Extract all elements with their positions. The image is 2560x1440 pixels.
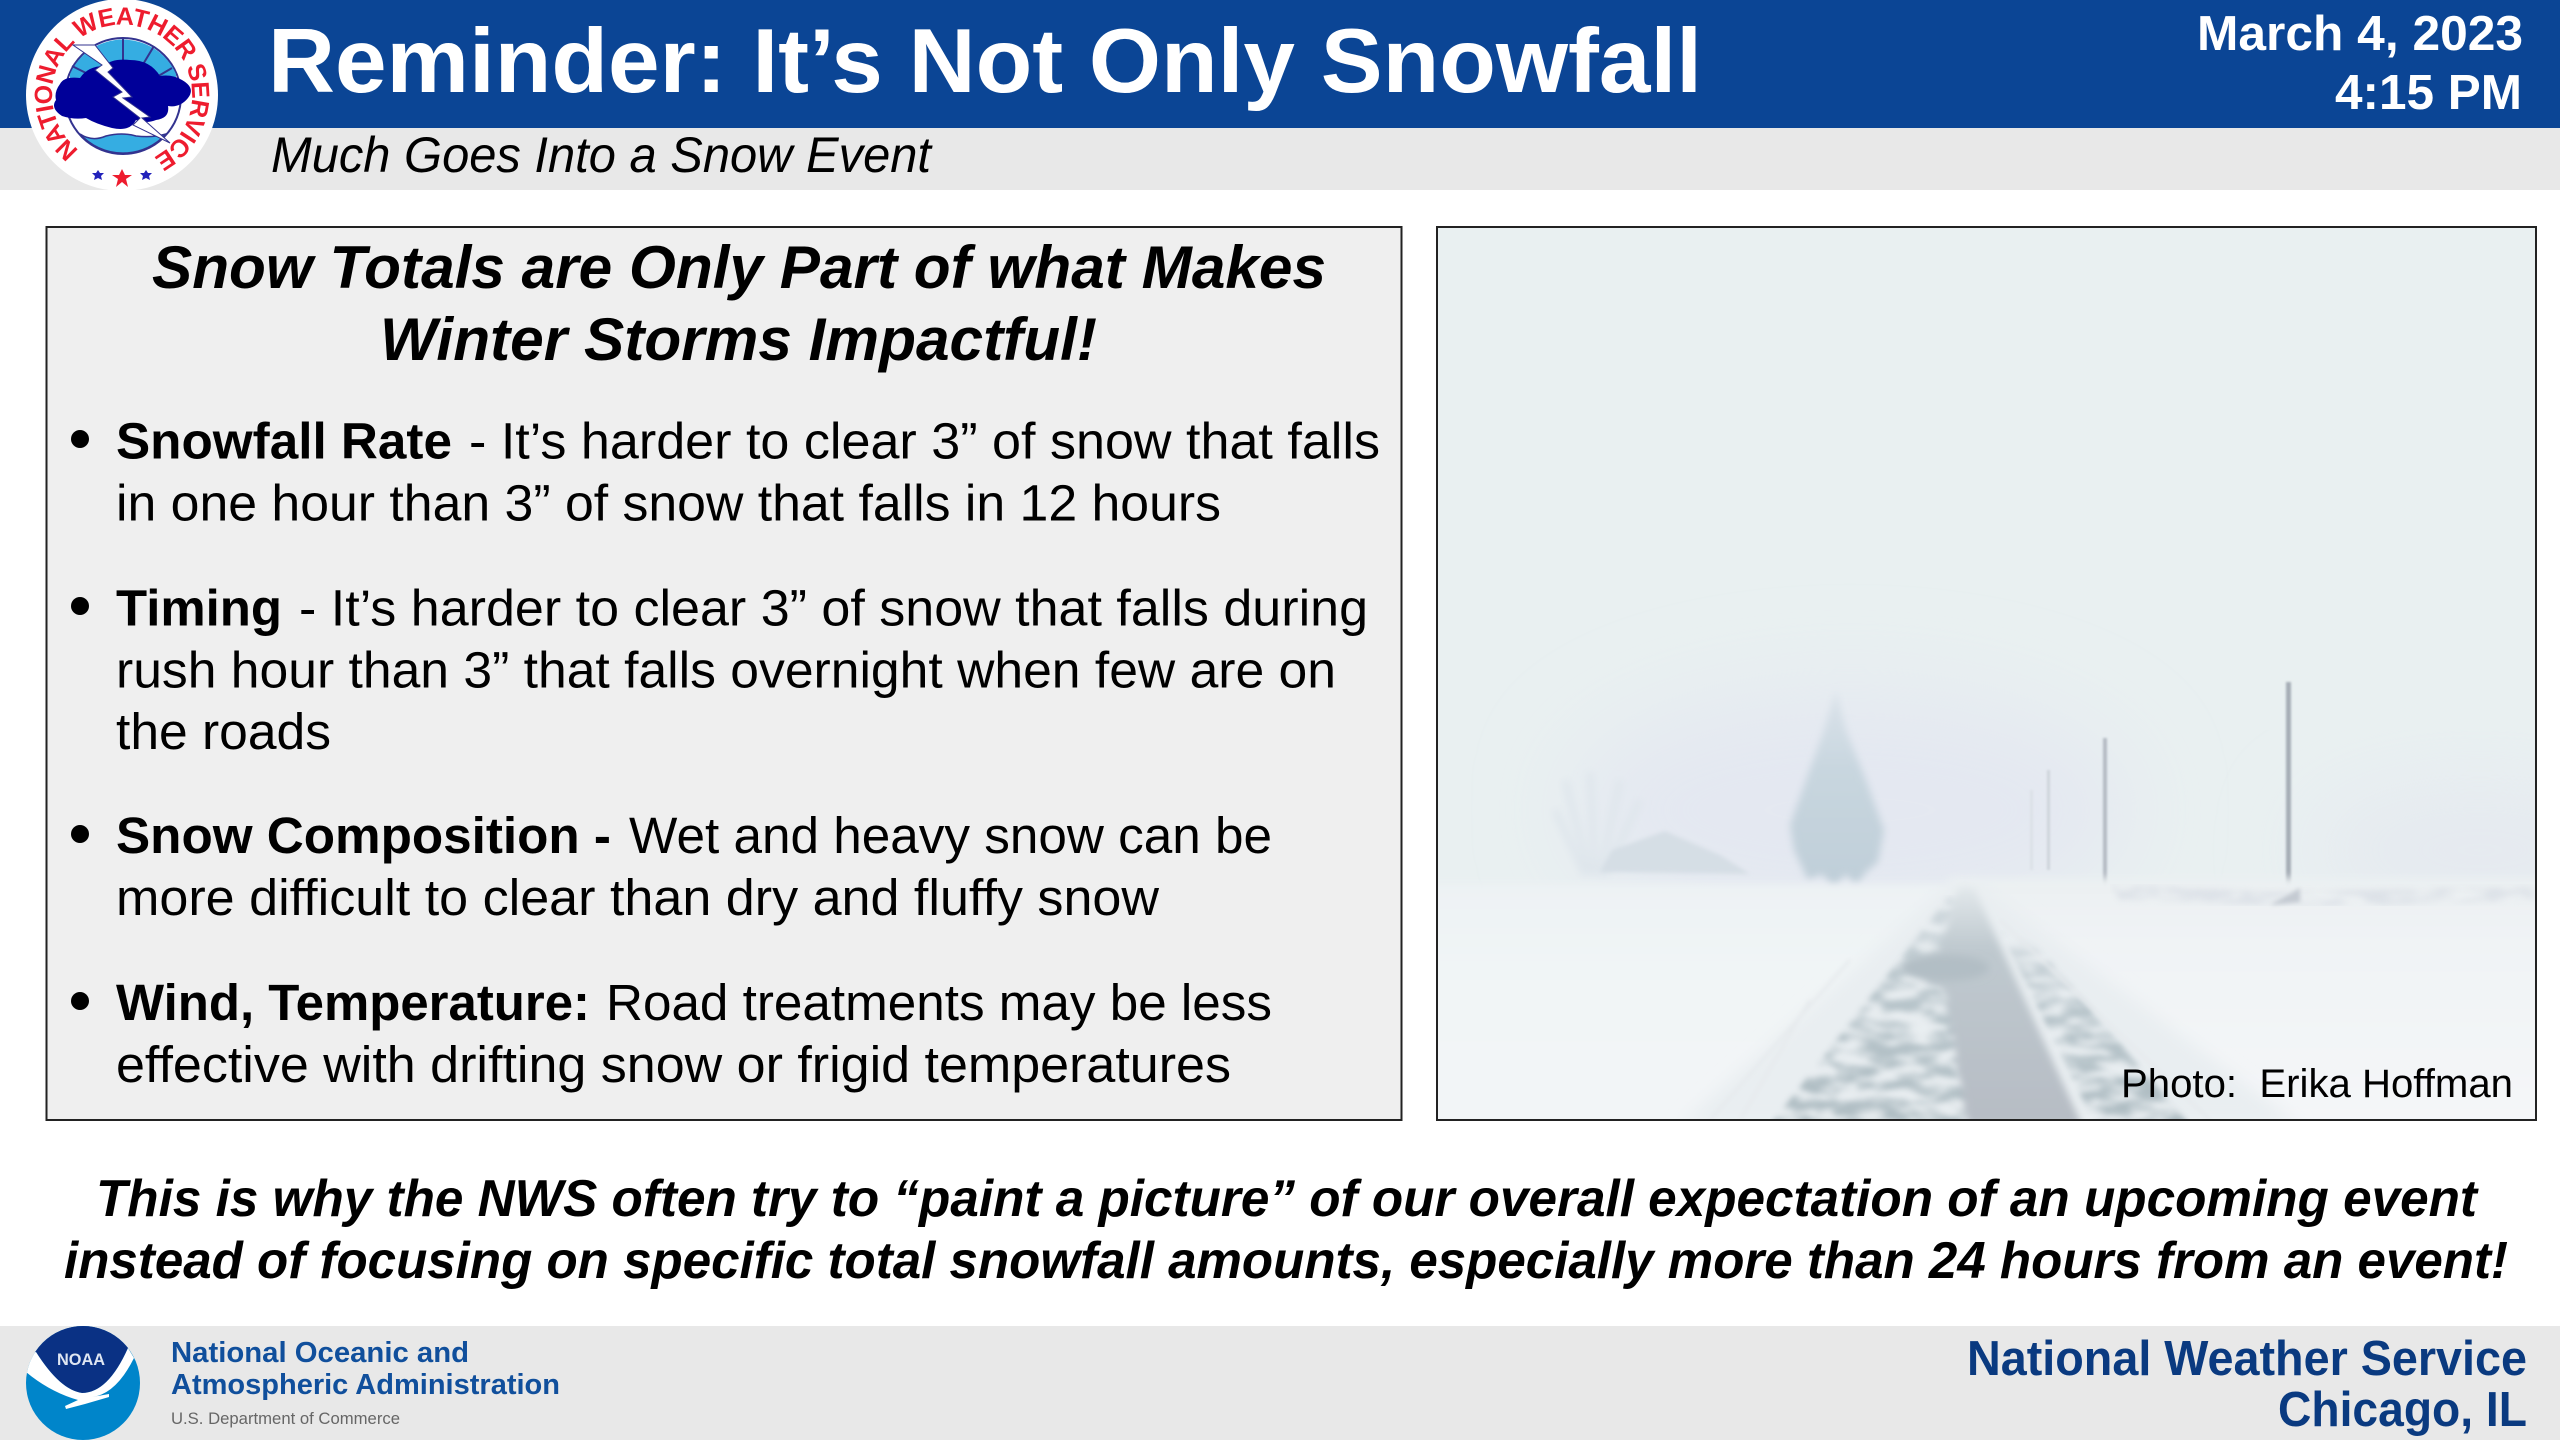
date and time (2197, 7, 2523, 120)
office name (1967, 1332, 2527, 1437)
NOAA agency name: National Oceanic and (171, 1337, 469, 1369)
panel: snow impact factors (46, 227, 1402, 1120)
date and time: 4:15 PM (2335, 66, 2522, 120)
snow field right (2050, 874, 2535, 1119)
footer bar (0, 1326, 2560, 1440)
NOAA agency name: Atmospheric Administration (171, 1369, 560, 1401)
bullet: snow composition: Snow Composition - (116, 807, 611, 864)
evergreen tree (1790, 690, 1884, 888)
closing statement: This is why the NWS often try to “paint a picture” of our overall expectation of an upcoming event (96, 1170, 2480, 1228)
bullet: snowfall rate: - It’s harder to clear 3” of snow that falls (469, 412, 1380, 470)
bullet: timing: Timing (116, 580, 282, 636)
bullet: snowfall rate (71, 412, 1380, 532)
bullet: timing: rush hour than 3” that falls overnight when few are on (116, 642, 1336, 698)
header bar (0, 0, 2560, 190)
utility poles (2046, 681, 2292, 882)
panel: snowy road scene (1420, 227, 2560, 1144)
bullet: wind and temperature (71, 974, 1272, 1093)
title: Reminder: It’s Not Only Snowfall (268, 11, 1702, 112)
bare tree (1582, 860, 1596, 870)
bullet: timing (71, 580, 1368, 760)
bullet: snow composition: more difficult to clear than dry and fluffy snow (116, 869, 1159, 926)
patchy left lane (1770, 895, 1975, 1125)
bullet: snowfall rate: in one hour than 3” of snow that falls in 12 hours (116, 474, 1221, 532)
panel heading: Snow Totals are Only Part of what Makes (152, 234, 1326, 301)
road centre surface (1934, 891, 2083, 1119)
blue fog near horizon (1570, 690, 2130, 930)
NOAA agency name (171, 1337, 560, 1428)
photo credit: Photo: Erika Hoffman (2121, 1062, 2513, 1106)
NOAA agency name: U.S. Department of Commerce (171, 1409, 400, 1428)
bullet: wind and temperature: effective with drifting snow or frigid temperatures (116, 1036, 1231, 1093)
closing statement (64, 1170, 2508, 1290)
wheel tracks (2044, 963, 2085, 1004)
farmhouse (1600, 831, 1750, 874)
closing statement: instead of focusing on specific total snowfall amounts, especially more than 24 hours from an event! (64, 1232, 2508, 1290)
bullet: wind and temperature: Road treatments may be less (606, 974, 1272, 1031)
date and time: March 4, 2023 (2197, 7, 2523, 61)
patchy right lane (2010, 946, 2188, 1119)
icon: NOAA logo (26, 1326, 140, 1440)
icon: National Weather Service logo: NATIONAL WEATHER SERVICE (34, 8, 210, 172)
bullet: timing: the roads (116, 703, 331, 760)
office name: National Weather Service (1967, 1332, 2527, 1386)
bullet: wind and temperature: Wind, Temperature: (116, 974, 590, 1031)
dark patch on road (1901, 955, 1989, 981)
office name: Chicago, IL (2278, 1383, 2527, 1437)
road shoulder snow (1723, 1009, 2277, 1119)
bullet: timing: - It’s harder to clear 3” of snow that falls during (299, 580, 1368, 636)
bullet: snow composition: Wet and heavy snow can be (629, 807, 1272, 864)
snow field left (1438, 881, 1923, 1119)
panel heading: Winter Storms Impactful! (380, 306, 1097, 373)
icon: NOAA logo: NOAA (57, 1350, 105, 1369)
bullet: snow composition (71, 807, 1272, 926)
panel heading (152, 234, 1326, 373)
bullet: snowfall rate: Snowfall Rate (116, 412, 452, 470)
subtitle: Much Goes Into a Snow Event (271, 127, 933, 183)
roadside drift (2118, 888, 2532, 905)
